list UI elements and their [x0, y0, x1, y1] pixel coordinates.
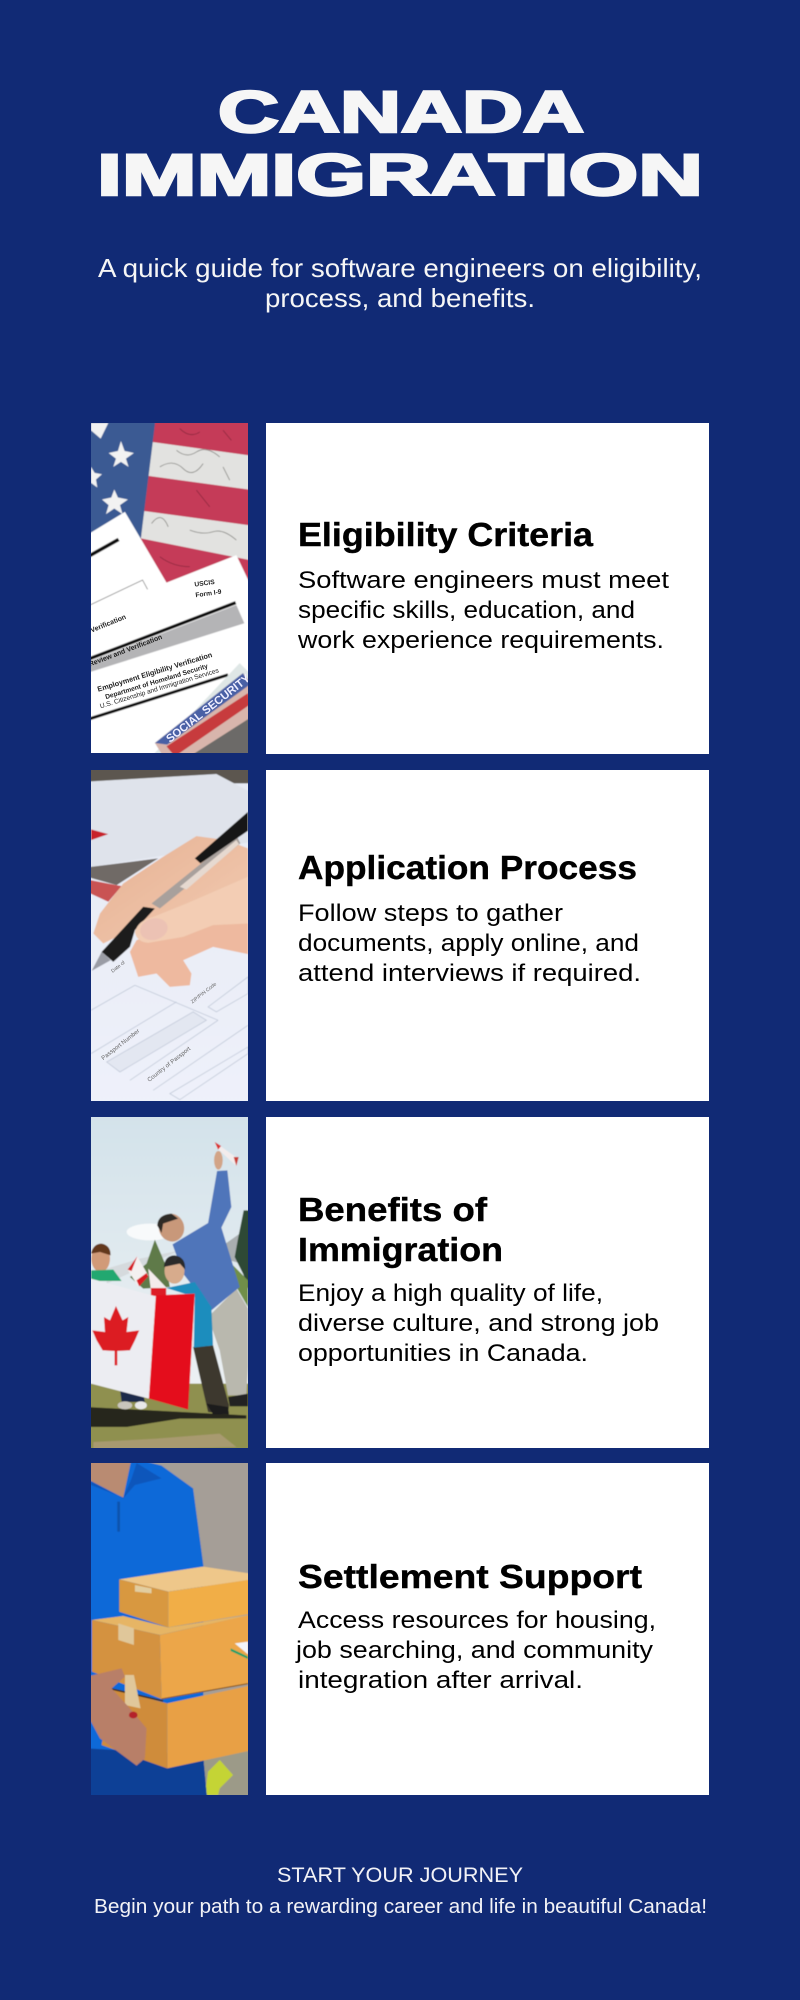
photo: hand writing on form: ZIP/PIN Code	[190, 981, 218, 1005]
body text	[295, 1607, 656, 1694]
title: CANADA	[218, 80, 584, 145]
body text: work experience requirements.	[297, 627, 664, 654]
heading: Application Process	[298, 849, 637, 886]
photo: US flag and I-9 forms	[88, 423, 253, 753]
body text	[298, 1280, 659, 1367]
body text: integration after arrival.	[298, 1667, 583, 1694]
photo: US flag and I-9 forms: SOCIAL SECURITY	[164, 672, 253, 745]
photo: hand writing on form: Country of Passport	[147, 1046, 192, 1084]
panel: benefits of immigration	[87, 1114, 709, 1450]
card: application text	[266, 770, 709, 1101]
body text: job searching, and community	[295, 1637, 653, 1664]
photo: hand writing on form: Passport Number	[101, 1028, 141, 1062]
photo: hand writing on form: Date of	[110, 959, 127, 974]
body text: diverse culture, and strong job	[298, 1310, 659, 1337]
body text: specific skills, education, and	[298, 597, 635, 624]
panel: eligibility criteria	[87, 417, 709, 756]
body text: Software engineers must meet	[298, 567, 669, 594]
body text	[297, 567, 669, 654]
heading: Settlement Support	[298, 1558, 642, 1595]
photo: US flag and I-9 forms: Department of Homeland Security	[105, 663, 209, 701]
subtitle: A quick guide for software engineers on eligibility,	[98, 253, 702, 283]
body text: Enjoy a high quality of life,	[298, 1280, 603, 1307]
photo: family with Canadian flags	[91, 1117, 248, 1448]
subtitle: process, and benefits.	[265, 283, 535, 313]
heading	[298, 1191, 503, 1268]
photo: US flag and I-9 forms: U.S. Citizenship and Immigration Services	[99, 667, 220, 710]
footer call to action	[94, 1864, 707, 1918]
photo: US flag and I-9 forms: Verification	[90, 614, 127, 634]
photo: US flag and I-9 forms: Form I-9	[195, 589, 222, 599]
card: settlement text	[266, 1463, 709, 1795]
heading: Benefits of	[298, 1191, 488, 1228]
body text: Follow steps to gather	[298, 900, 563, 927]
footer call to action: START YOUR JOURNEY	[277, 1864, 523, 1887]
subtitle	[98, 253, 702, 313]
title: IMMIGRATION	[97, 143, 703, 208]
footer call to action: Begin your path to a rewarding career and life in beautiful Canada!	[94, 1896, 707, 1918]
title	[97, 80, 703, 208]
heading: Eligibility Criteria	[298, 516, 594, 553]
photo: hand writing on form	[91, 770, 248, 1101]
photo: person carrying boxes	[91, 1463, 248, 1795]
photo: US flag and I-9 forms: Review and Verification	[88, 634, 163, 668]
card: benefits text	[266, 1117, 709, 1448]
heading: Immigration	[298, 1231, 503, 1268]
body text: documents, apply online, and	[298, 930, 639, 957]
card: eligibility text	[266, 423, 709, 754]
body text: attend interviews if required.	[298, 960, 641, 987]
photo: US flag and I-9 forms: Employment Eligibility Verification	[96, 650, 213, 694]
panel: settlement support	[87, 1458, 709, 1798]
body text: Access resources for housing,	[298, 1607, 656, 1634]
body text: opportunities in Canada.	[298, 1340, 588, 1367]
photo: US flag and I-9 forms: USCIS	[194, 579, 216, 589]
panel: application process	[87, 767, 709, 1104]
body text	[298, 900, 641, 987]
